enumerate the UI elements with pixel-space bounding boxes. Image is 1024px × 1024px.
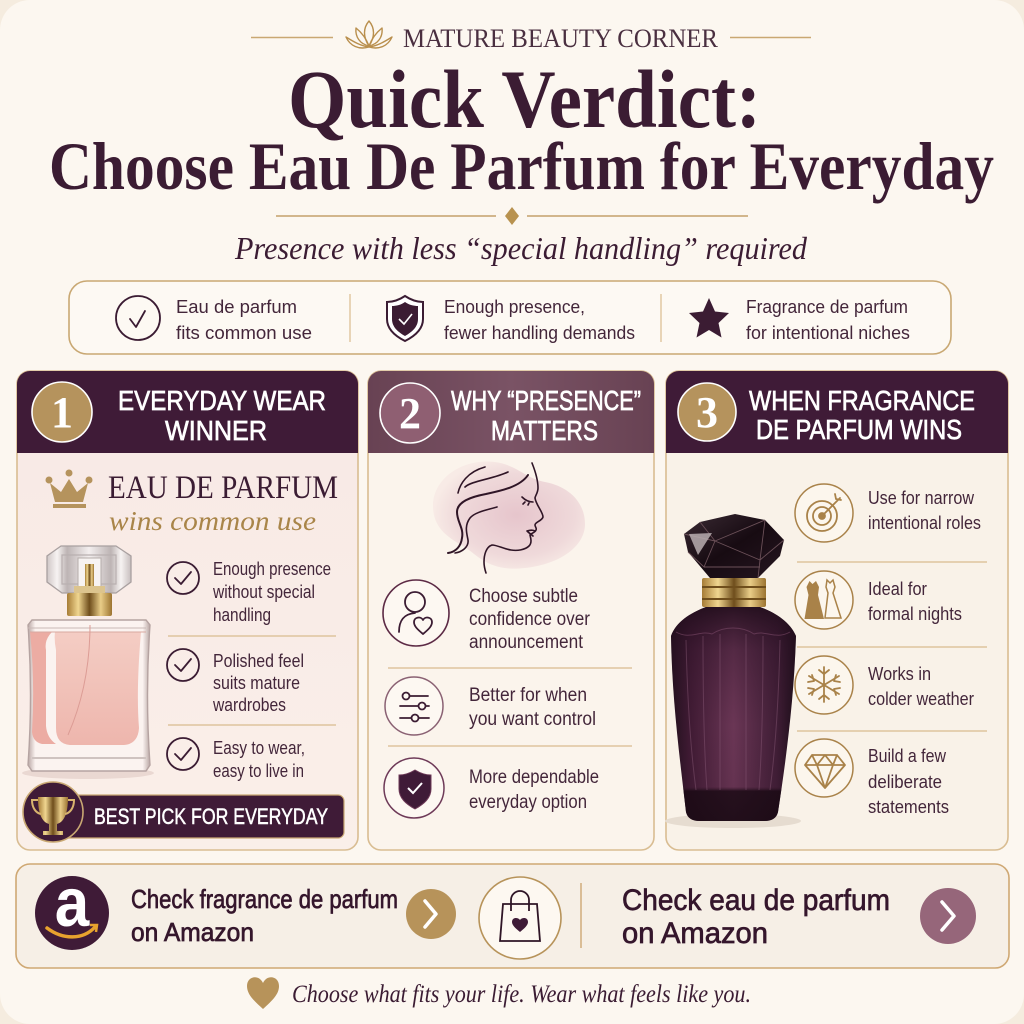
illustration: woman profile [433,461,585,573]
check list [167,558,336,781]
check item 2 [167,649,304,715]
panel 1 header [17,371,358,453]
reason 2: Better for when [469,685,587,706]
icon: crown [46,470,92,508]
icon: shopping bag [479,877,561,959]
icon: snowflake [808,667,840,702]
icon: trophy [32,797,74,835]
summary item 1: fits common use [176,322,312,343]
winner heading: EAU DE PARFUM [108,470,338,506]
use case 2: formal nights [868,603,962,624]
icon: sliders [400,692,429,722]
bottle: eau de parfum [22,546,154,779]
best pick banner: BEST PICK FOR EVERYDAY [94,804,328,829]
summary item 3: Fragrance de parfum [746,296,908,317]
brand header [251,21,811,53]
check item 1: handling [213,604,271,625]
reason 3 [384,758,599,818]
panel 2 header: 2 [399,389,421,438]
panel 3: when fragrance de parfum wins [665,371,1008,850]
reason 1: confidence over [469,609,591,630]
best pick banner [23,782,344,842]
use case 3 [795,656,974,714]
check item 3 [167,737,305,781]
panel 3 header [666,371,1008,453]
icon: lotus [346,21,392,48]
check item 2: Polished feel [213,650,304,671]
icon: person with heart [399,592,432,634]
use case 4: deliberate [868,771,942,792]
reason 3: everyday option [469,792,587,813]
icon: star [689,298,729,338]
use case 2: Ideal for [868,578,927,599]
title divider with diamond [276,207,748,225]
bottle: fragrance de parfum [665,514,801,828]
winner heading [108,470,338,536]
panel 3 header: DE PARFUM WINS [756,414,962,445]
summary item 1: Eau de parfum [176,296,297,317]
icon: amazon badge: a [55,864,90,941]
use case 3: Works in [868,663,931,684]
use case 4 [795,739,949,817]
use case 2 [795,571,962,629]
icon: check circle [116,296,160,340]
panel 2: why presence matters [368,371,654,850]
icon: diamond [805,755,845,788]
link: fragrance de parfum [131,884,398,947]
use case 1: intentional roles [868,512,981,533]
icon: dresses [804,580,841,619]
title: Quick Verdict: [288,53,761,145]
icon: heart [247,977,279,1009]
use case 4: Build a few [868,745,947,766]
icon: shield check [399,770,431,809]
link: fragrance de parfum: Check fragrance de parfum [131,884,398,914]
check item 1: without special [212,581,315,602]
summary item 3 [746,296,910,343]
panel 1 header: WINNER [165,415,267,446]
icon: shield [387,296,423,341]
panel 1: everyday wear winner [17,371,358,850]
summary item 2: Enough presence, [444,296,585,317]
arrow button: rose [920,888,976,944]
check item 2: wardrobes [212,694,286,715]
arrow button: gold [406,889,456,939]
call to action bar [16,864,1009,968]
use case 1: Use for narrow [868,487,975,508]
summary item 3: for intentional niches [746,322,910,343]
use case 1 [795,484,981,542]
reason 2 [385,677,596,735]
panel 2 header: MATTERS [491,415,598,446]
link: fragrance de parfum: on Amazon [131,917,254,947]
reason 1 [383,580,591,653]
winner heading: wins common use [109,506,316,536]
panel 3 header: 3 [696,388,718,437]
reason 1: Choose subtle [469,586,578,607]
title [49,53,994,204]
link: eau de parfum [622,884,890,950]
summary item 2: fewer handling demands [444,322,635,343]
panel 2 header [368,371,654,453]
summary strip [69,281,951,354]
link: eau de parfum: on Amazon [622,917,768,950]
check item 3: easy to live in [213,760,304,781]
reason 1: announcement [469,632,584,653]
panel 1 header: 1 [51,388,73,437]
use case 3: colder weather [868,688,974,709]
brand header: MATURE BEAUTY CORNER [403,24,719,53]
link: eau de parfum: Check eau de parfum [622,884,890,917]
icon: target [807,494,841,531]
use case 4: statements [868,796,949,817]
panel 1 header: EVERYDAY WEAR [118,385,326,416]
check item 3: Easy to wear, [213,737,305,758]
check item 2: suits mature [213,672,300,693]
footer tagline: Choose what fits your life. Wear what feels like you. [292,981,751,1008]
panel 3 header: WHEN FRAGRANCE [749,385,975,416]
summary item 2 [444,296,635,343]
reason 2: you want control [469,709,596,730]
icon: amazon badge [35,864,109,950]
summary item 1 [176,296,312,343]
subtitle: Presence with less “special handling” required [234,230,808,266]
check item 1: Enough presence [213,558,331,579]
reason 3: More dependable [469,767,599,788]
check item 1 [167,558,331,625]
panel 2 header: WHY “PRESENCE” [451,385,641,416]
